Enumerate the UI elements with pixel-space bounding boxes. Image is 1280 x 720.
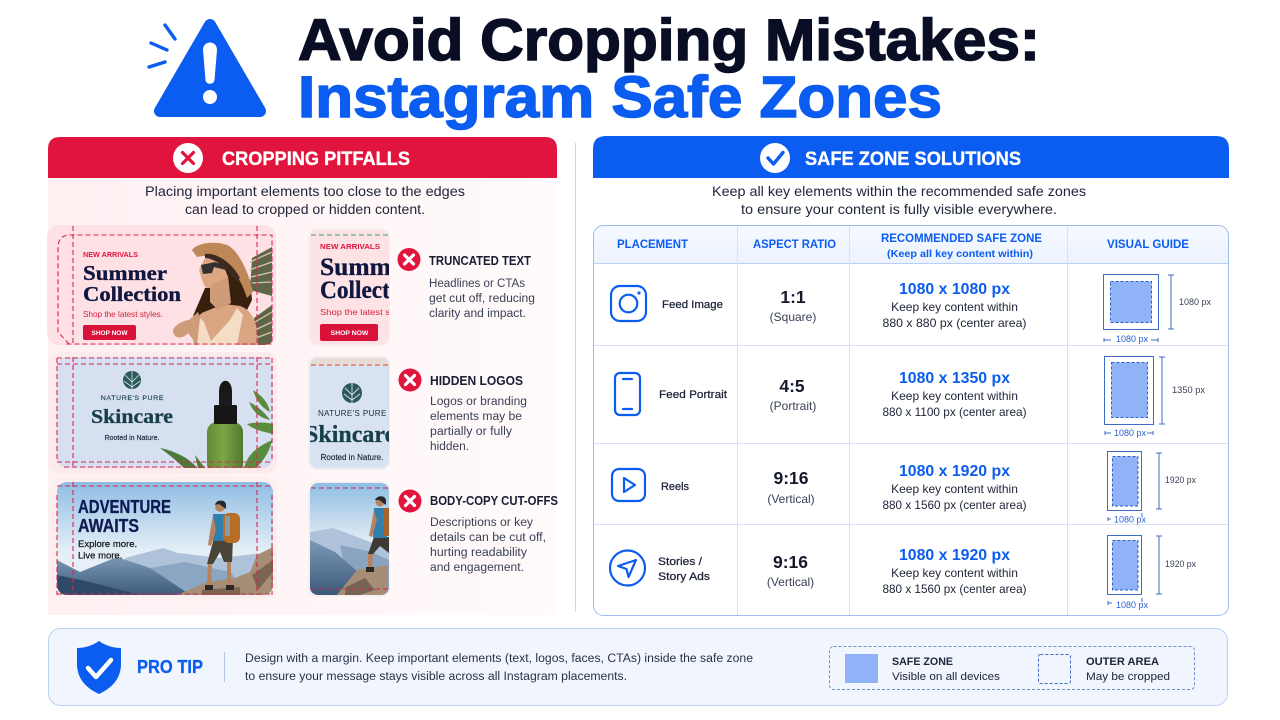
icon: shield check bbox=[77, 641, 121, 694]
table: placements bbox=[594, 226, 1228, 616]
row: reels: Reels bbox=[661, 481, 689, 493]
icon: error x, hidden logos bbox=[398, 368, 422, 392]
banner: skincare bbox=[48, 352, 277, 474]
visual guide: 1080 x 1080 bbox=[1104, 274, 1211, 344]
pitfall: truncated text: TRUNCATED TEXT bbox=[429, 254, 531, 268]
row: stories / story ads: Story Ads bbox=[658, 571, 711, 583]
pitfall: body-copy cut-offs: details can be cut off, bbox=[430, 532, 546, 544]
panel: pro tip bbox=[48, 628, 1228, 706]
banner: adventure awaits: Live more. bbox=[78, 550, 122, 562]
row: stories / story ads: 1080 x 1920 px bbox=[899, 547, 1010, 564]
row: stories / story ads: (Vertical) bbox=[767, 575, 814, 589]
table header: PLACEMENT bbox=[617, 239, 688, 251]
pitfalls intro text bbox=[145, 184, 465, 217]
row: stories / story ads: Stories / bbox=[658, 556, 703, 568]
title bbox=[298, 8, 1040, 130]
pitfall: hidden logos: HIDDEN LOGOS bbox=[430, 374, 523, 388]
row: reels: (Vertical) bbox=[767, 492, 815, 506]
cropped thumbnail: summer: SHOP NOW bbox=[331, 330, 369, 337]
pitfalls intro text: can lead to cropped or hidden content. bbox=[185, 202, 425, 217]
pitfall: hidden logos: Logos or branding bbox=[430, 396, 527, 408]
icon: send arrow bbox=[610, 550, 645, 586]
row: stories / story ads: Keep key content within bbox=[891, 566, 1018, 580]
banner: summer collection: Collection bbox=[83, 282, 181, 306]
legend text: outer area bbox=[1086, 656, 1170, 683]
row: stories / story ads bbox=[610, 536, 1196, 610]
banner: summer collection: Summer bbox=[83, 261, 167, 285]
banner: summer collection bbox=[47, 225, 276, 345]
pitfall: hidden logos: hidden. bbox=[430, 441, 469, 453]
visual guide: 1080 x 1920 stories bbox=[1108, 536, 1196, 610]
panel header: cropping pitfalls bbox=[48, 137, 557, 178]
panel header: safe zone solutions: SAFE ZONE SOLUTIONS bbox=[805, 149, 1021, 170]
visual guide: 1080 x 1350 bbox=[1104, 356, 1206, 438]
visual guide: 1080 x 1920 stories: 1920 px bbox=[1165, 559, 1196, 569]
row: feed portrait: Feed Portrait bbox=[659, 389, 727, 401]
title: Instagram Safe Zones bbox=[298, 65, 942, 130]
solutions intro text: Keep all key elements within the recommended safe zones bbox=[712, 184, 1086, 199]
cropped thumbnail: skincare: Skincare bbox=[305, 422, 396, 448]
pitfall: truncated text bbox=[429, 254, 535, 320]
legend text: outer area: OUTER AREA bbox=[1086, 656, 1159, 668]
icon: play bbox=[612, 469, 645, 501]
row: feed portrait: (Portrait) bbox=[770, 399, 816, 413]
pitfall: truncated text: clarity and impact. bbox=[429, 308, 526, 320]
row: feed image: 1:1 bbox=[780, 287, 806, 307]
cropped thumbnail: summer: Collection bbox=[320, 275, 421, 304]
table header: ASPECT RATIO bbox=[753, 239, 836, 251]
banner: summer collection: NEW ARRIVALS bbox=[83, 252, 138, 259]
pitfall: truncated text: get cut off, reducing bbox=[429, 293, 535, 305]
pitfall: body-copy cut-offs: Descriptions or key bbox=[430, 517, 533, 529]
banner: skincare: NATURE'S PURE bbox=[101, 395, 164, 402]
row: feed image: 880 x 880 px (center area) bbox=[882, 316, 1027, 330]
row: feed image: 1080 x 1080 px bbox=[899, 281, 1010, 298]
pitfall: hidden logos bbox=[430, 374, 527, 453]
visual guide: 1080 x 1080: 1080 px bbox=[1116, 334, 1148, 344]
pitfall: hidden logos: partially or fully bbox=[430, 426, 512, 438]
panel: cropping pitfalls bbox=[47, 137, 558, 615]
icon: error x, body copy bbox=[398, 490, 422, 512]
cropped thumbnail: summer bbox=[308, 228, 390, 346]
hiker bbox=[205, 500, 240, 590]
row: feed image bbox=[611, 274, 1211, 344]
table header: VISUAL GUIDE bbox=[1107, 239, 1189, 251]
banner: adventure awaits: Explore more. bbox=[78, 539, 137, 550]
pro tip text: Design with a margin. Keep important elements (text, logos, faces, CTAs) inside the safe zone bbox=[245, 653, 753, 665]
cropped thumbnail: hiker bbox=[308, 481, 390, 597]
pitfall: body-copy cut-offs: BODY-COPY CUT-OFFS bbox=[430, 494, 558, 508]
icon: warning triangle bbox=[149, 25, 260, 111]
pitfall: truncated text: Headlines or CTAs bbox=[429, 278, 525, 290]
visual guide: 1080 x 1920 reels bbox=[1108, 452, 1196, 524]
visual guide: 1080 x 1350: 1080 px bbox=[1114, 428, 1146, 438]
legend text: safe zone: Visible on all devices bbox=[892, 671, 1001, 683]
visual guide: 1080 x 1080: 1080 px bbox=[1179, 297, 1211, 307]
panel header: cropping pitfalls: CROPPING PITFALLS bbox=[222, 149, 410, 170]
legend swatch: outer area bbox=[1038, 654, 1070, 684]
icon: phone bbox=[615, 373, 640, 415]
row: stories / story ads: 9:16 bbox=[773, 552, 808, 572]
row: stories / story ads: 880 x 1560 px (center area) bbox=[882, 582, 1027, 596]
row: reels: 880 x 1560 px (center area) bbox=[882, 498, 1027, 512]
banner: skincare: Skincare bbox=[91, 407, 173, 428]
logo: leaf mark cropped bbox=[342, 383, 362, 403]
banner: adventure awaits bbox=[56, 482, 273, 595]
solutions intro text: to ensure your content is fully visible everywhere. bbox=[741, 202, 1057, 217]
row: reels: 9:16 bbox=[773, 468, 809, 488]
table header bbox=[617, 233, 1189, 260]
table header: RECOMMENDED SAFE ZONE bbox=[881, 233, 1042, 245]
row: feed image: Keep key content within bbox=[891, 300, 1018, 314]
row: feed portrait bbox=[615, 356, 1206, 438]
visual guide: 1080 x 1920 stories: 1080 px bbox=[1116, 600, 1148, 610]
panel header: safe zone solutions bbox=[593, 136, 1229, 178]
title: Avoid Cropping Mistakes: bbox=[298, 8, 1040, 73]
pitfall: body-copy cut-offs: hurting readability bbox=[430, 547, 527, 559]
row: reels bbox=[612, 452, 1196, 524]
banner: adventure awaits: AWAITS bbox=[78, 516, 139, 536]
row: feed portrait: 1080 x 1350 px bbox=[899, 370, 1010, 387]
banner: summer collection: SHOP NOW bbox=[92, 330, 128, 337]
icon: error x, truncated text bbox=[398, 248, 420, 271]
cropped thumbnail: summer: Summer bbox=[320, 252, 413, 281]
pitfall: body-copy cut-offs bbox=[430, 494, 558, 574]
visual guide: 1080 x 1920 reels: 1920 px bbox=[1165, 475, 1196, 485]
row: feed image: (Square) bbox=[770, 310, 816, 324]
banner: skincare: Rooted in Nature. bbox=[105, 435, 159, 442]
cropped thumbnail: skincare bbox=[305, 356, 396, 470]
visual guide: 1080 x 1920 reels: 1080 px bbox=[1114, 514, 1146, 524]
pro tip text bbox=[245, 653, 753, 683]
legend swatch: safe zone bbox=[845, 654, 878, 683]
row: reels: Keep key content within bbox=[891, 482, 1018, 496]
row: feed portrait: 4:5 bbox=[779, 376, 805, 396]
pitfalls intro text: Placing important elements too close to the edges bbox=[145, 184, 465, 199]
row: feed image: Feed Image bbox=[662, 299, 723, 311]
cropped thumbnail: summer: Shop the latest styles. bbox=[320, 307, 412, 317]
row: feed portrait: 880 x 1100 px (center area) bbox=[882, 405, 1027, 419]
table header: (Keep all key content within) bbox=[887, 249, 1033, 260]
pro tip label: PRO TIP bbox=[137, 657, 203, 677]
legend text: outer area: May be cropped bbox=[1086, 671, 1170, 683]
hiker cropped bbox=[366, 496, 389, 572]
banner: summer collection: Shop the latest styles. bbox=[83, 309, 163, 319]
pro tip text: to ensure your message stays visible across all Instagram placements. bbox=[245, 671, 627, 683]
banner: adventure awaits: ADVENTURE bbox=[78, 497, 171, 517]
cropped thumbnail: summer: NEW ARRIVALS bbox=[320, 244, 380, 251]
row: reels: 1080 x 1920 px bbox=[899, 463, 1010, 480]
visual guide: 1080 x 1350: 1350 px bbox=[1172, 385, 1206, 395]
legend text: safe zone: SAFE ZONE bbox=[892, 656, 953, 668]
panel: safe zone solutions bbox=[593, 136, 1229, 616]
cropped thumbnail: skincare: Rooted in Nature. bbox=[321, 453, 383, 462]
legend bbox=[830, 646, 1194, 690]
logo: leaf mark bbox=[123, 370, 141, 390]
pitfall: hidden logos: elements may be bbox=[430, 411, 522, 423]
pitfall: body-copy cut-offs: and engagement. bbox=[430, 562, 524, 574]
solutions intro text bbox=[712, 184, 1086, 217]
icon: instagram camera bbox=[611, 286, 646, 321]
legend text: safe zone bbox=[892, 656, 1001, 683]
row: feed portrait: Keep key content within bbox=[891, 389, 1018, 403]
cropped thumbnail: skincare: NATURE'S PURE bbox=[318, 409, 387, 418]
